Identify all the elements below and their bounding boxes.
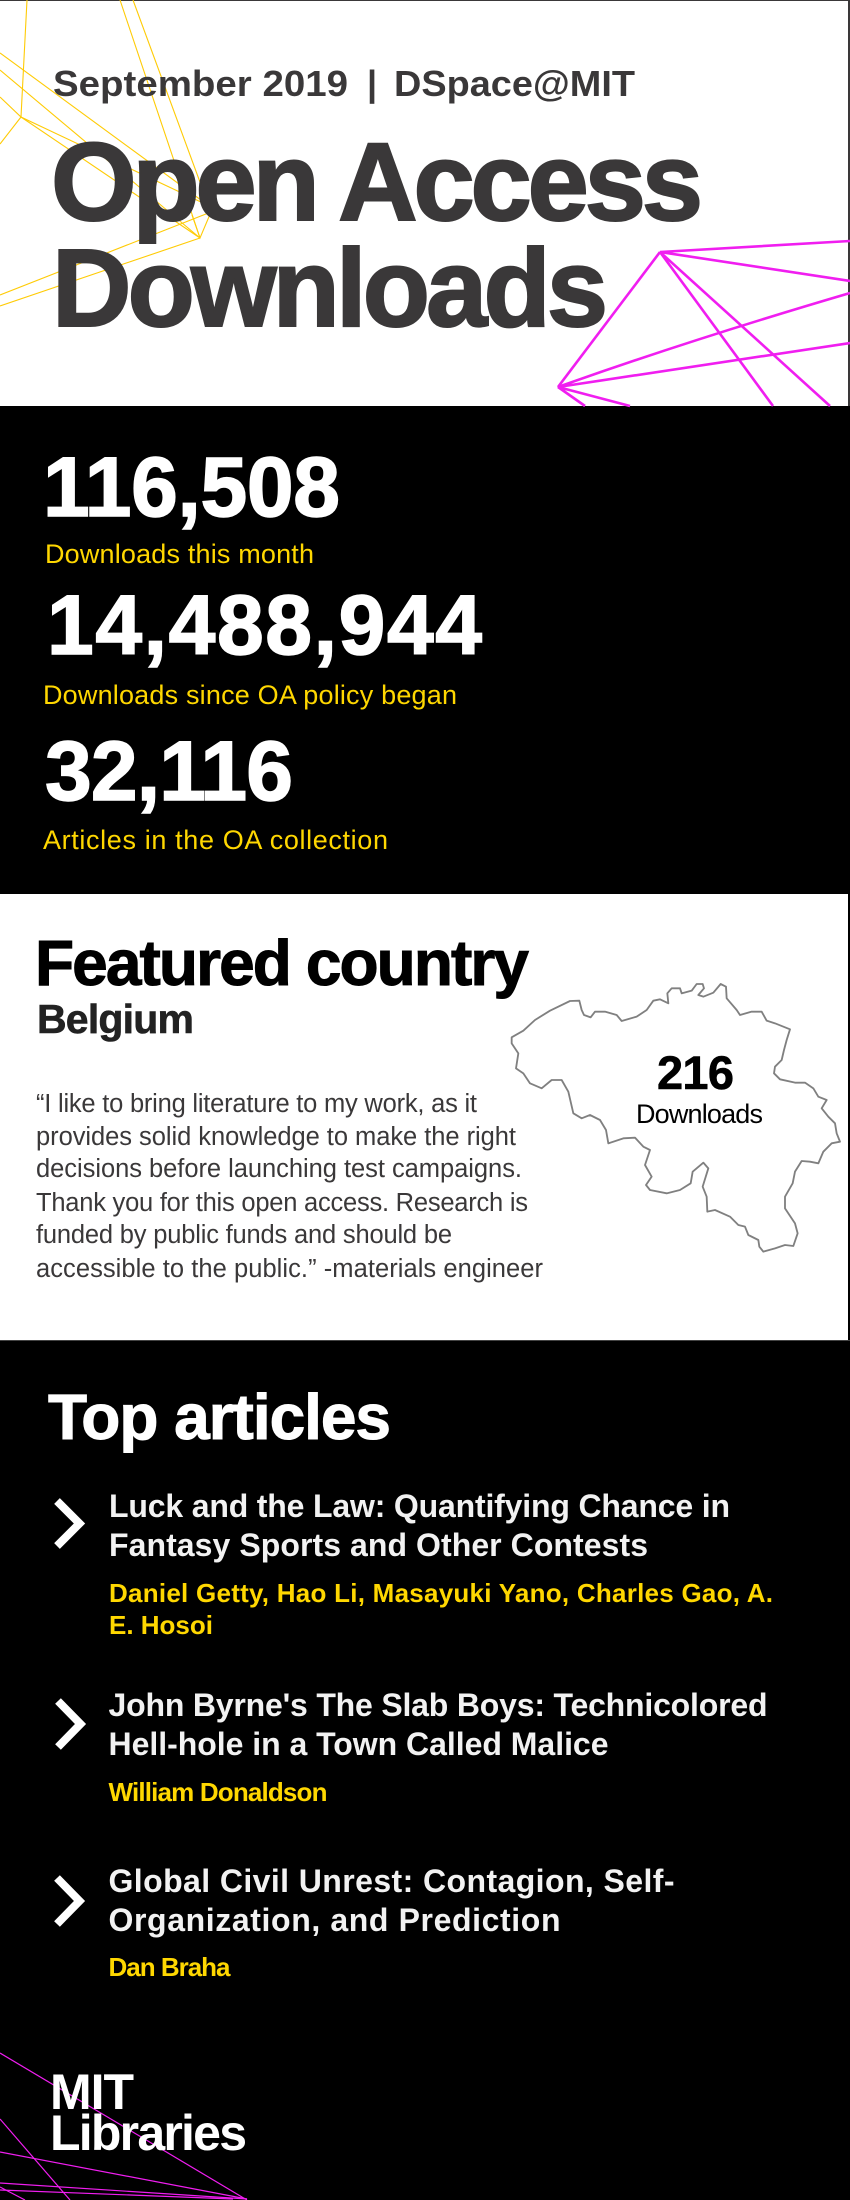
quote: decisions before launching test campaigns. <box>36 1155 522 1183</box>
icon: chevron <box>57 1501 80 1546</box>
title: Open Access <box>51 121 703 244</box>
icon: chevron <box>58 1701 80 1747</box>
stat: downloads this month: Downloads this month <box>45 539 314 569</box>
date and source line: DSpace@MIT <box>394 63 635 104</box>
magenta line decoration <box>558 241 850 406</box>
article 1 authors: Daniel Getty, Hao Li, Masayuki Yano, Charles Gao, A. <box>109 1578 773 1608</box>
yellow line decoration <box>0 0 211 306</box>
article 2 title <box>108 1687 768 1762</box>
date and source line <box>53 63 635 105</box>
footer magenta line decoration <box>0 2053 247 2200</box>
stat: Belgium downloads: Downloads <box>636 1099 763 1129</box>
article 1 <box>57 1488 773 1640</box>
quote: accessible to the public.” -materials engineer <box>36 1255 544 1283</box>
article 2 title: Hell-hole in a Town Called Malice <box>108 1726 608 1762</box>
article 3 author: Dan Braha <box>108 1952 231 1982</box>
article 3 <box>57 1863 674 1982</box>
stat: downloads since OA policy began: Downloads since OA policy began <box>43 680 457 710</box>
article 2 author: William Donaldson <box>108 1777 328 1807</box>
panel: top articles <box>0 1340 850 1982</box>
logo: MIT Libraries: MIT <box>50 2064 134 2120</box>
stat: articles in the OA collection <box>43 724 388 855</box>
article 3 title: Global Civil Unrest: Contagion, Self- <box>108 1863 674 1899</box>
icon: chevron <box>57 1878 80 1924</box>
article 1 authors <box>109 1578 773 1640</box>
article 3 title <box>108 1863 674 1938</box>
stat: downloads since OA policy began: 14,488,944 <box>47 578 482 672</box>
quote: funded by public funds and should be <box>36 1221 452 1249</box>
title: Downloads <box>52 227 608 350</box>
panel: featured country <box>0 894 848 1340</box>
stat: articles in the OA collection: Articles in the OA collection <box>43 825 388 855</box>
date and source line: | <box>367 63 377 105</box>
article 1 title <box>109 1488 730 1563</box>
article 3 title: Organization, and Prediction <box>108 1902 560 1938</box>
title <box>51 121 703 350</box>
map: Belgium outline <box>512 984 840 1252</box>
article 1 title: Luck and the Law: Quantifying Chance in <box>109 1488 730 1524</box>
stat: articles in the OA collection: 32,116 <box>45 724 293 818</box>
heading: featured country: Featured country <box>35 927 529 999</box>
quote: provides solid knowledge to make the right <box>36 1123 516 1151</box>
quote: “I like to bring literature to my work, as it <box>36 1090 477 1118</box>
subheading: Belgium: Belgium <box>37 996 194 1042</box>
article 2 <box>58 1687 768 1807</box>
quote: Thank you for this open access. Research is <box>36 1189 528 1217</box>
article 2 title: John Byrne's The Slab Boys: Technicolored <box>108 1687 768 1723</box>
stat: Belgium downloads: 216 <box>657 1046 734 1099</box>
heading: top articles: Top articles <box>48 1381 391 1453</box>
panel: header <box>0 0 850 406</box>
stat: Belgium downloads <box>636 1046 763 1129</box>
stat: downloads this month: 116,508 <box>43 440 340 534</box>
article 1 authors: E. Hosoi <box>109 1610 213 1640</box>
logo: MIT Libraries: Libraries <box>50 2105 247 2161</box>
panel: statistics <box>43 440 482 855</box>
date and source line: September 2019 <box>53 63 348 104</box>
logo: MIT Libraries <box>50 2064 247 2161</box>
article 1 title: Fantasy Sports and Other Contests <box>109 1527 648 1563</box>
quote <box>36 1090 544 1283</box>
